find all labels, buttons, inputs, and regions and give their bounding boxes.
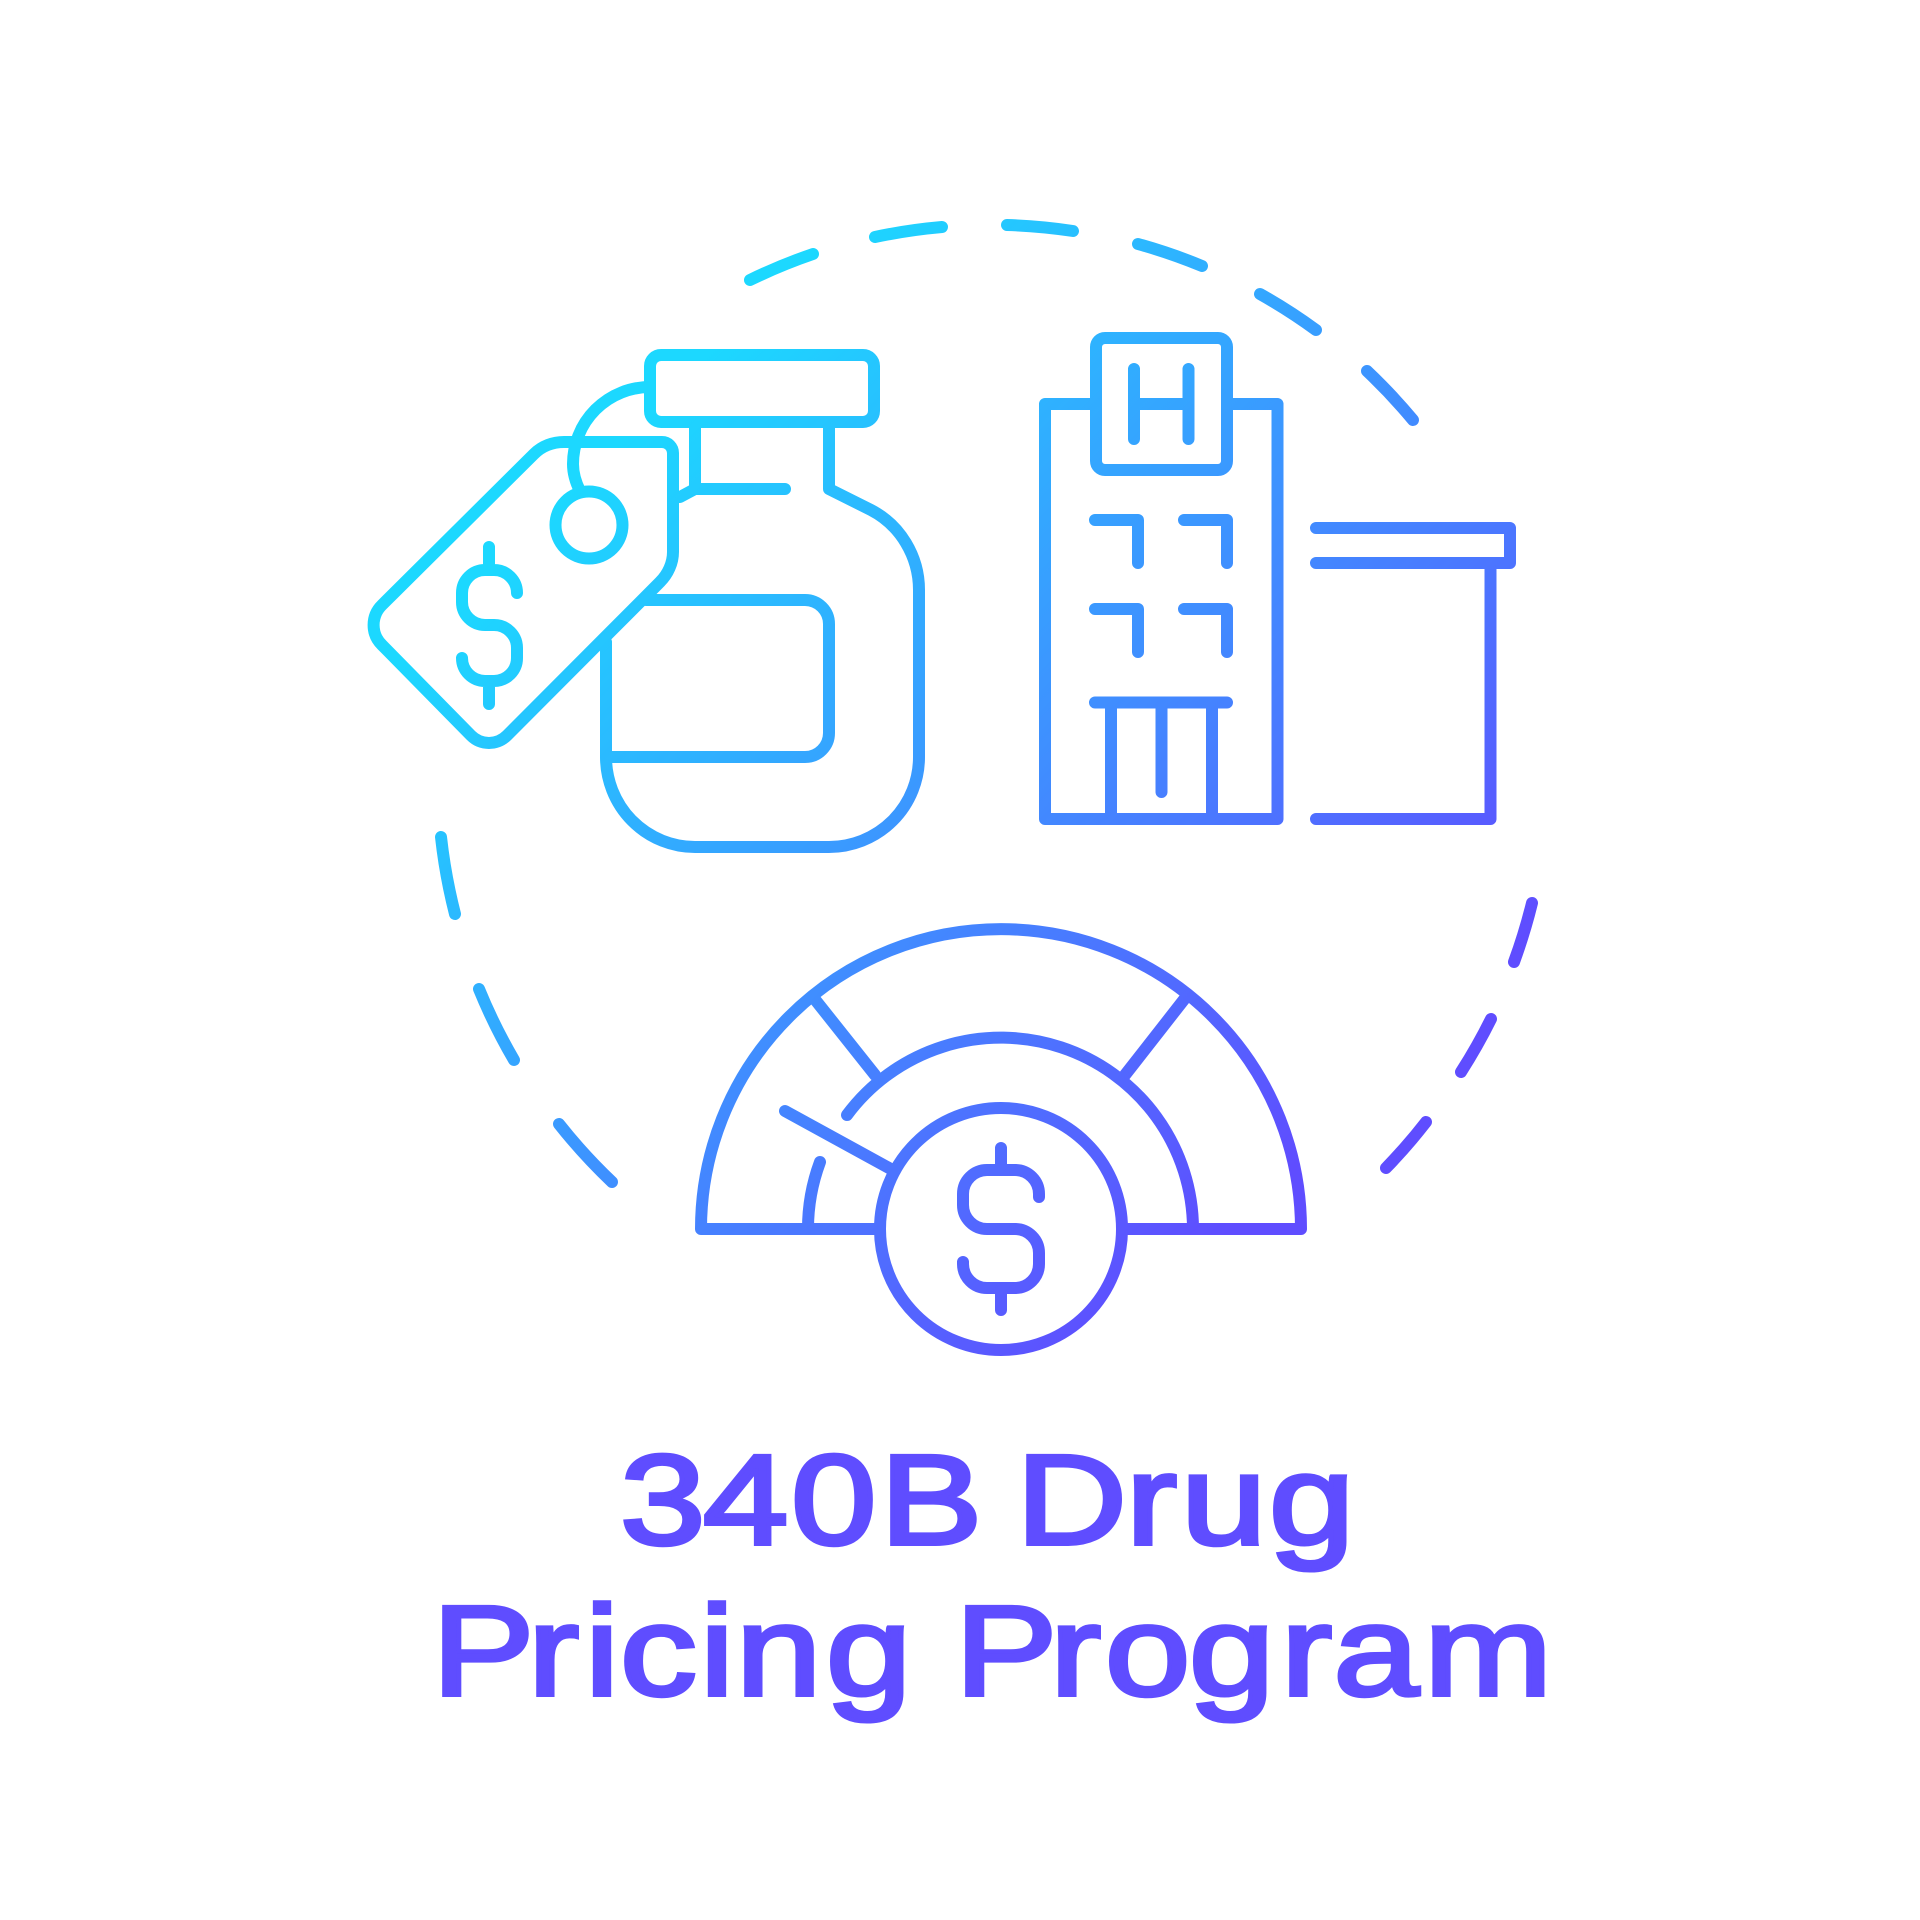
tag hole [556,492,622,558]
coin dollar sign [963,1148,1039,1310]
helipad sign block [1096,338,1227,470]
gauge inner arc [847,1038,1193,1229]
title: Program [955,1579,1552,1722]
gauge left arc segment [808,1162,820,1229]
icon: price gauge [701,929,1301,1350]
icon group: all line art [374,225,1532,1350]
icon: medicine bottle [606,355,919,847]
tag string [573,387,650,491]
title: 340B [620,1428,982,1571]
main tower outline [1045,404,1278,819]
gauge needle [785,1111,889,1168]
icon: price tag [374,387,673,743]
gauge ticks [813,997,1186,1075]
icon: hospital building [1045,338,1278,819]
title: Drug [1016,1428,1354,1571]
icon: adjacent wing building [1316,528,1510,819]
tag dollar sign [462,547,517,704]
bottle cap [650,355,874,422]
windows [1095,520,1227,652]
entrance doors [1095,702,1227,819]
title [432,1428,1552,1722]
tag outline [374,442,673,743]
bottle label [606,600,829,757]
coin [880,1108,1122,1350]
gauge outer arc and base [701,929,1301,1229]
letter H [1134,369,1188,439]
bottle neck and body [606,422,919,847]
title: Pricing [432,1579,911,1722]
dashed ring around the icons [441,225,1532,1182]
